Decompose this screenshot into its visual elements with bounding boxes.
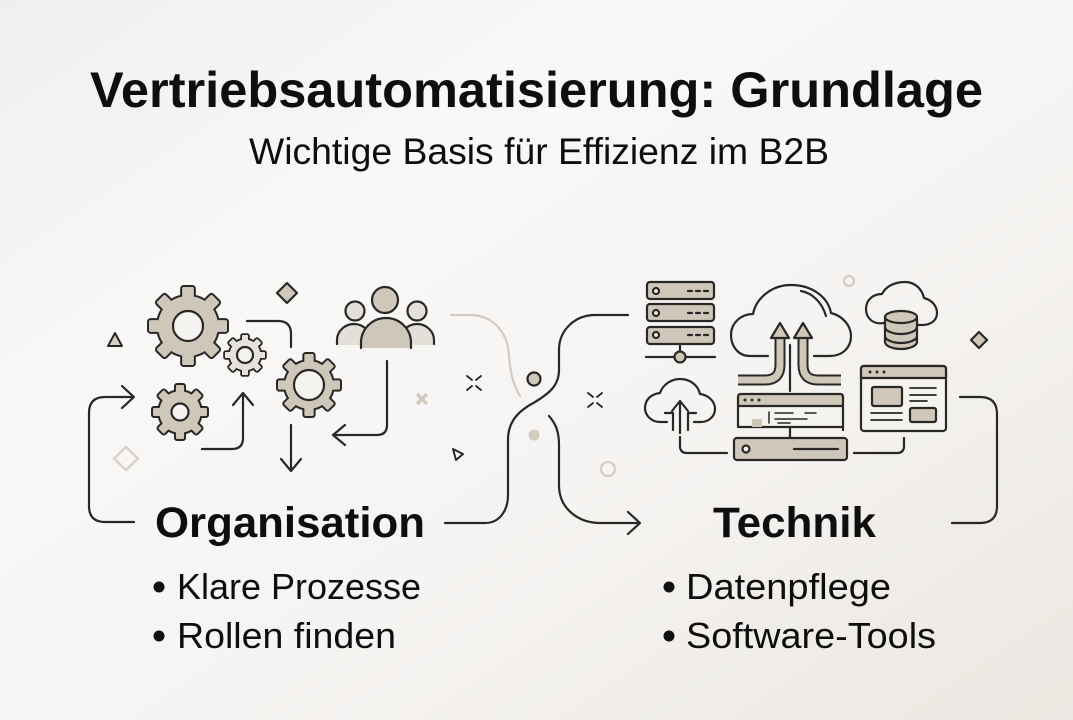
icon: medium gear — [278, 354, 340, 416]
heading: technik: Technik — [713, 499, 876, 547]
icon: small upload cloud — [645, 379, 715, 433]
icon: database cloud — [866, 282, 937, 349]
panel: technik icons — [645, 276, 987, 460]
arrow: up to small gear — [202, 393, 253, 449]
list item: rollen finden: Rollen finden — [177, 615, 396, 656]
decorative shapes right — [844, 276, 987, 348]
icon: people group — [337, 287, 434, 348]
icon: server bar — [734, 438, 847, 460]
icon: server rack — [646, 282, 715, 362]
icon: lower gear — [153, 385, 207, 439]
list item: software-tools: Software-Tools — [686, 615, 936, 656]
list item: datenpflege: Datenpflege — [686, 566, 891, 607]
arrow: server connectors — [680, 437, 904, 453]
icon: app panel — [738, 394, 843, 438]
subtitle: Wichtige Basis für Effizienz im B2B — [249, 131, 829, 172]
title: Vertriebsautomatisierung: Grundlage — [90, 62, 983, 118]
decorative shapes left — [108, 283, 463, 470]
icon: upload arrows — [738, 323, 841, 391]
arrow: from people to gear — [333, 361, 387, 445]
arrow: right loop — [952, 397, 997, 523]
panel: organisation text — [154, 499, 425, 656]
arrow: down — [281, 425, 301, 471]
heading: organisation: Organisation — [155, 499, 425, 547]
panel: technik text — [664, 499, 936, 656]
icon: browser window — [861, 366, 946, 431]
icon: big cloud — [731, 285, 851, 356]
arrow: left loop — [89, 386, 134, 522]
panel: organisation icons — [149, 287, 434, 471]
icon: large gear — [149, 287, 227, 365]
panel: central connectors — [445, 315, 640, 534]
icon: small gear — [225, 335, 265, 375]
arrow: connector to gear — [247, 321, 291, 347]
list item: klare prozesse: Klare Prozesse — [177, 566, 421, 607]
